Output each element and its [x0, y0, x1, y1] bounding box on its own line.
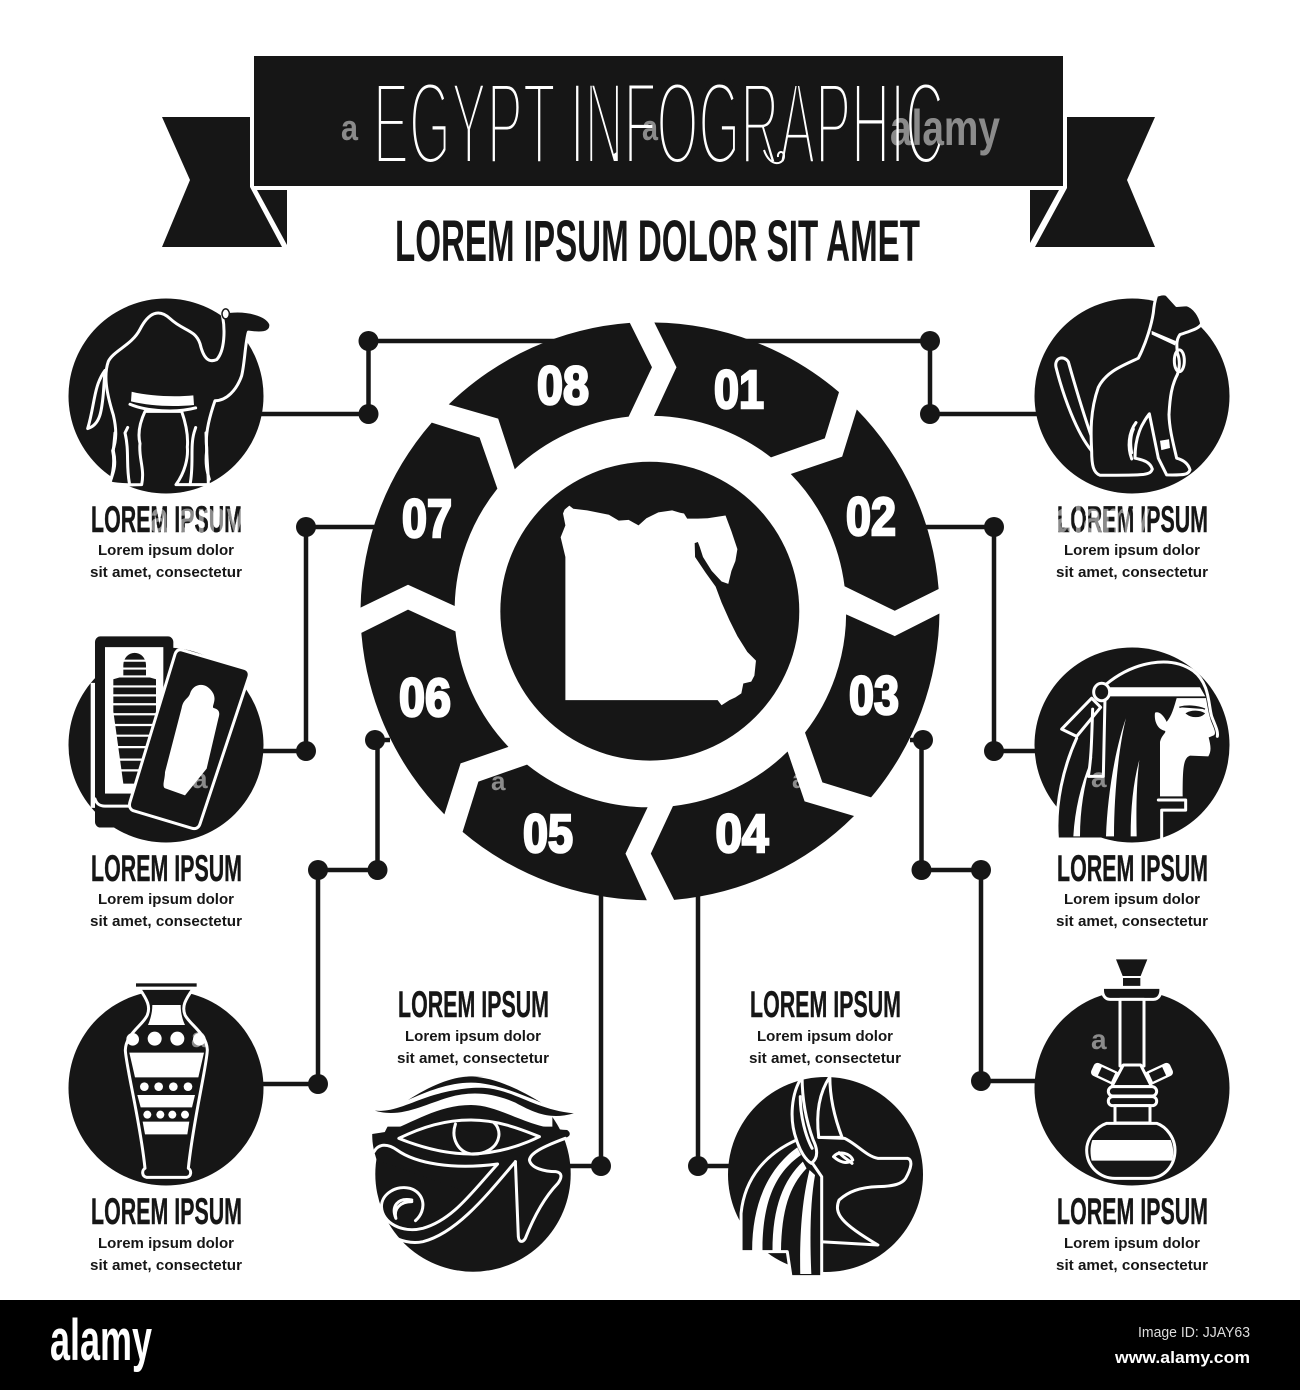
description: sit amet, consectetur — [90, 914, 242, 930]
footer logo: alamy — [50, 1308, 152, 1373]
subtitle: LOREM IPSUM DOLOR SIT AMET — [395, 209, 920, 274]
description — [1056, 892, 1208, 930]
segment numbers: 03 — [849, 666, 899, 726]
description: Lorem ipsum dolor — [405, 1029, 541, 1045]
description — [90, 1236, 242, 1274]
extra watermark glyphs: a — [642, 107, 659, 148]
description: Lorem ipsum dolor — [98, 1236, 234, 1252]
segment numbers: 02 — [846, 487, 896, 547]
ring watermarks — [491, 764, 807, 796]
panel: mummy sarcophagus — [68, 636, 264, 930]
circle — [68, 648, 264, 842]
heading watermark: alamy — [1055, 493, 1150, 542]
ribbon tail left — [162, 117, 282, 247]
circle — [68, 990, 264, 1186]
icon: anubis — [741, 1077, 911, 1277]
icon: bastet cat — [1056, 294, 1202, 475]
connector lines — [255, 331, 1040, 1176]
centre disc — [500, 462, 799, 761]
segment numbers — [399, 356, 899, 864]
map of Egypt — [561, 506, 756, 705]
description: sit amet, consectetur — [397, 1051, 549, 1067]
footer bar — [0, 1300, 1300, 1390]
heading watermark: alamy — [150, 493, 245, 542]
icon: vase — [125, 983, 207, 1177]
central ring diagram — [361, 323, 939, 900]
description — [1056, 1236, 1208, 1274]
panel: vase — [68, 983, 264, 1274]
circle — [375, 1076, 571, 1272]
title R flourish — [764, 150, 784, 163]
description: sit amet, consectetur — [1056, 565, 1208, 581]
ring watermarks: a — [792, 764, 807, 794]
description: Lorem ipsum dolor — [98, 543, 234, 559]
icon: hookah — [1087, 959, 1175, 1178]
heading: LOREM IPSUM — [91, 1191, 242, 1232]
ribbon tail right — [1035, 117, 1155, 247]
description — [90, 892, 242, 930]
circle — [1034, 990, 1230, 1186]
segment numbers: 04 — [716, 804, 768, 864]
circle — [68, 298, 264, 494]
ribbon fold left — [257, 190, 287, 245]
website: www.alamy.com — [1114, 1348, 1250, 1367]
image id: Image ID: JJAY63 — [1138, 1324, 1250, 1341]
segment numbers: 06 — [399, 668, 451, 728]
description: Lorem ipsum dolor — [1064, 1236, 1200, 1252]
segment numbers: 08 — [537, 356, 589, 416]
ribbon fold right — [1030, 190, 1059, 243]
icon: sarcophagus — [91, 636, 249, 829]
description: sit amet, consectetur — [749, 1051, 901, 1067]
ring watermarks: a — [491, 766, 506, 796]
title watermark: alamy — [890, 100, 1000, 156]
description: sit amet, consectetur — [90, 565, 242, 581]
extra watermark glyphs — [191, 107, 1107, 1053]
segment numbers: 01 — [714, 360, 764, 420]
extra watermark glyphs: a — [341, 107, 359, 148]
description: Lorem ipsum dolor — [757, 1029, 893, 1045]
banner body — [254, 56, 1063, 186]
icon: woman — [1057, 662, 1218, 838]
description: Lorem ipsum dolor — [1064, 892, 1200, 908]
ring segments — [361, 323, 939, 900]
icon: eye of horus — [371, 1077, 574, 1242]
extra watermark glyphs: a — [1091, 762, 1107, 793]
extra watermark glyphs: a — [191, 1022, 207, 1053]
panel: hookah — [1034, 959, 1230, 1274]
circle — [1034, 648, 1230, 842]
description: Lorem ipsum dolor — [98, 892, 234, 908]
description: sit amet, consectetur — [90, 1258, 242, 1274]
panel: camel — [68, 298, 271, 581]
heading: LOREM IPSUM — [398, 984, 549, 1025]
panel: cat — [1034, 294, 1230, 581]
segment numbers: 07 — [402, 489, 452, 549]
heading: LOREM IPSUM — [750, 984, 901, 1025]
title banner — [162, 56, 1155, 247]
circle — [728, 1077, 923, 1272]
description — [749, 1029, 901, 1067]
description: Lorem ipsum dolor — [1064, 543, 1200, 559]
hookah watermark: a — [1091, 1024, 1107, 1055]
description: sit amet, consectetur — [1056, 914, 1208, 930]
description — [90, 543, 242, 581]
panel: anubis — [728, 984, 923, 1277]
segment numbers: 05 — [523, 804, 573, 864]
circle — [1034, 298, 1230, 494]
description: sit amet, consectetur — [1056, 1258, 1208, 1274]
extra watermark glyphs: a — [192, 763, 208, 794]
panel: eye of horus — [371, 984, 574, 1272]
panel: egyptian woman profile — [1034, 648, 1230, 930]
heading: LOREM IPSUM — [91, 499, 242, 540]
description — [1056, 543, 1208, 581]
icon: camel — [88, 309, 271, 485]
description — [397, 1029, 549, 1067]
heading: LOREM IPSUM — [91, 848, 242, 889]
